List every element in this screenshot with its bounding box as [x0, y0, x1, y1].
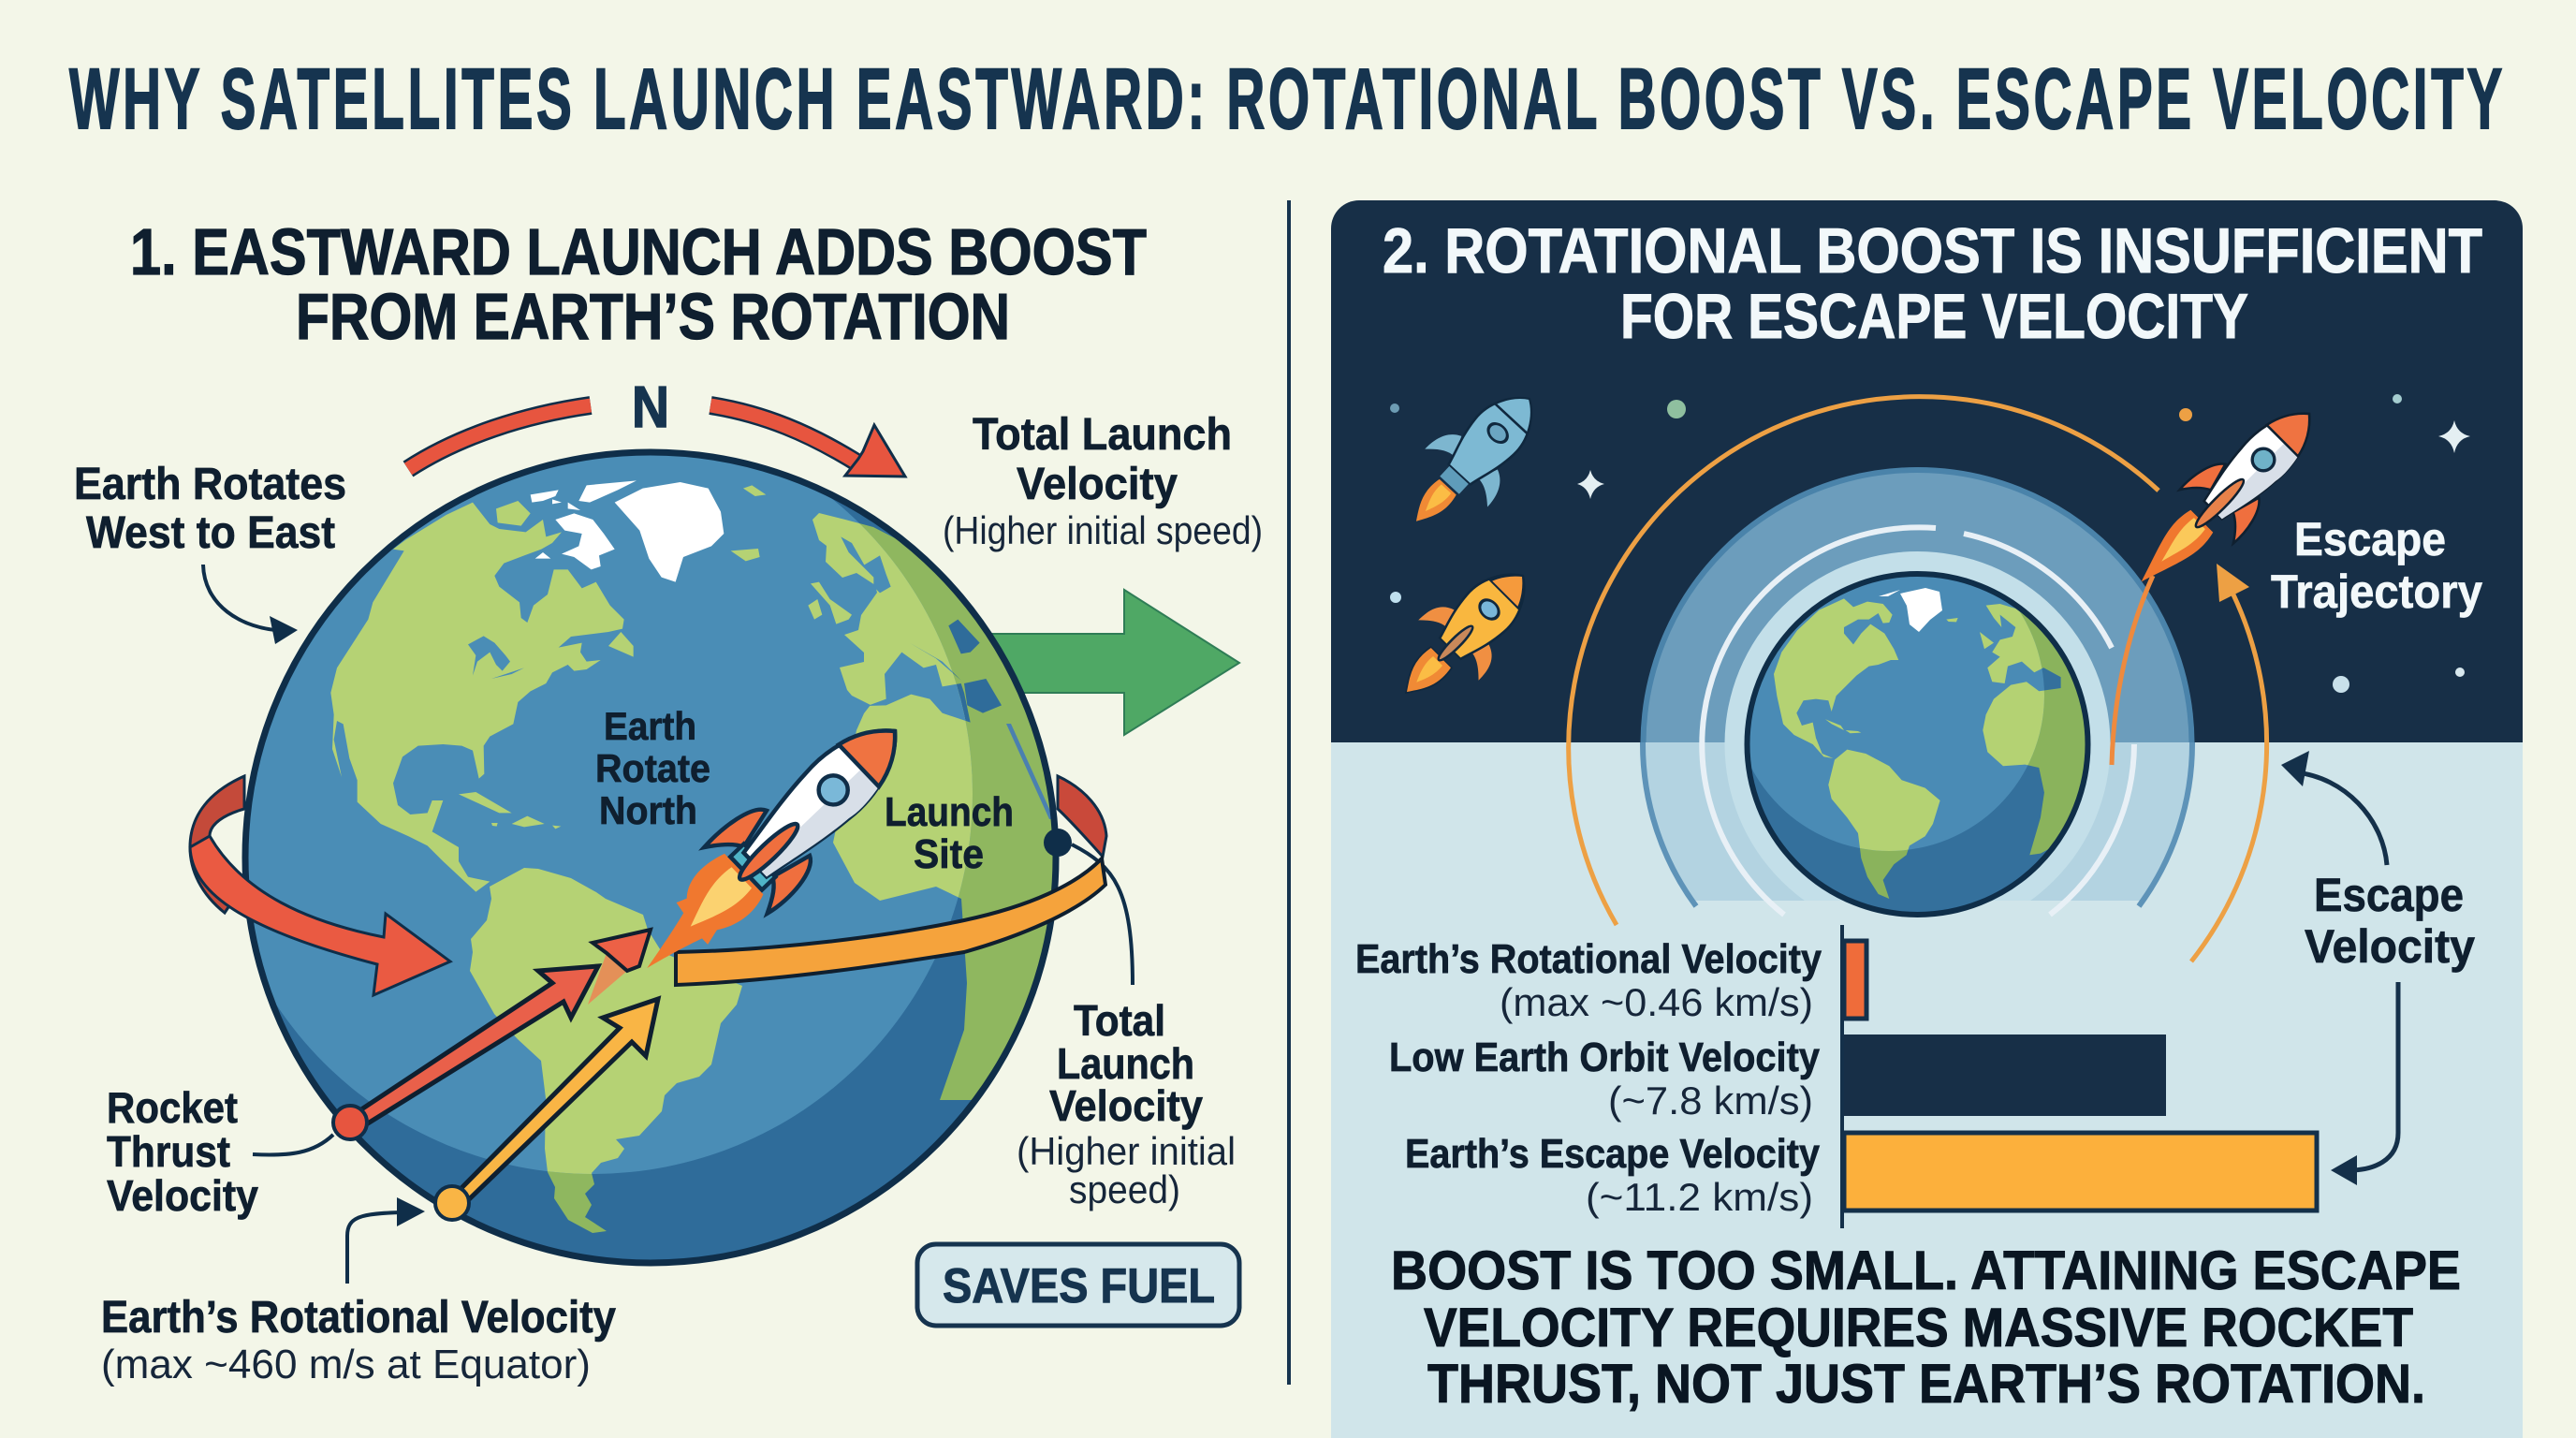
- label: escape trajectory: Escape: [2294, 513, 2446, 565]
- arrow: rotational velocity: [435, 999, 658, 1220]
- leader line: rocket thrust: [253, 1135, 333, 1155]
- heading: panel 2: FOR ESCAPE VELOCITY: [1620, 281, 2248, 352]
- icon: white escape rocket: [2115, 387, 2336, 609]
- globe: left earth: [242, 449, 1060, 1266]
- arc: orbit trajectory: [1569, 397, 2159, 925]
- arc: escape arrow: [2191, 564, 2267, 961]
- label: escape velocity: Escape: [2314, 869, 2464, 921]
- ribbon: orange equator band: [676, 858, 1105, 985]
- heading: panel 1: 1. EASTWARD LAUNCH ADDS BOOST: [130, 215, 1147, 288]
- label: earth rotates west to east: [74, 460, 346, 558]
- icon: main rocket: [614, 697, 927, 1002]
- chart axis: [1840, 925, 1844, 1228]
- label: total launch velocity top: (Higher initial speed): [943, 508, 1263, 552]
- panel: escape velocity: [1331, 200, 2523, 1438]
- label: total launch velocity lower: Velocity: [1049, 1081, 1203, 1130]
- label: launch site: Launch: [885, 789, 1014, 835]
- bar chart: velocities: [1355, 925, 2317, 1228]
- label: earth's rotational velocity: [101, 1293, 616, 1387]
- heading: panel 1: [130, 215, 1147, 353]
- callout: saves fuel: [917, 1244, 1239, 1326]
- icon: yellow rocket: [1376, 546, 1553, 723]
- label: rocket thrust velocity: Thrust: [107, 1127, 230, 1176]
- label: total launch velocity top: Velocity: [1017, 460, 1178, 509]
- conclusion text: BOOST IS TOO SMALL. ATTAINING ESCAPE: [1391, 1240, 2461, 1301]
- arrow: north rotation left arc: [408, 405, 591, 469]
- stars and dots: [1390, 394, 2470, 693]
- panel: eastward launch: [74, 215, 1263, 1387]
- bar: earth's escape velocity: Earth’s Escape Velocity: [1405, 1131, 1820, 1177]
- leader line: launch site to total velocity: [1072, 844, 1133, 985]
- bar: earth's rotational velocity: (max ~0.46 km/s): [1500, 980, 1813, 1024]
- bar: low earth orbit velocity: Low Earth Orbit Velocity: [1389, 1034, 1820, 1080]
- label: earth rotate north: Earth: [604, 704, 696, 748]
- label: earth rotate north: North: [599, 788, 697, 832]
- conclusion text: THRUST, NOT JUST EARTH’S ROTATION.: [1427, 1354, 2425, 1415]
- label: total launch velocity lower: speed): [1069, 1167, 1180, 1211]
- heading: panel 2: [1383, 215, 2482, 352]
- bar: low earth orbit velocity: (~7.8 km/s): [1608, 1078, 1813, 1123]
- icon: blue rocket: [1385, 370, 1560, 550]
- label: total launch velocity lower: [1017, 996, 1236, 1211]
- panel background: [1331, 200, 2523, 1438]
- label: earth's rotational velocity: (max ~460 m/s at Equator): [101, 1342, 591, 1387]
- arrow: escape velocity up pointer: [2281, 751, 2387, 865]
- label: total launch velocity lower: Total: [1074, 996, 1165, 1045]
- label: total launch velocity lower: Launch: [1057, 1039, 1194, 1088]
- bar: earth's rotational velocity: Earth’s Rotational Velocity: [1355, 936, 1822, 982]
- label: earth rotates west to east: West to East: [86, 508, 335, 558]
- divider: [1287, 200, 1291, 1385]
- label: launch site: [885, 789, 1014, 877]
- conclusion text: VELOCITY REQUIRES MASSIVE ROCKET: [1424, 1298, 2413, 1358]
- launch site dot: [1044, 829, 1072, 857]
- label: earth rotates west to east: Earth Rotates: [74, 460, 346, 509]
- label: escape velocity: Velocity: [2305, 920, 2475, 973]
- label: earth rotate north: Rotate: [595, 746, 710, 790]
- bar: earth's escape velocity: [1405, 1131, 2317, 1219]
- compass N: N: [632, 375, 669, 440]
- arrow: green total velocity: [973, 590, 1239, 735]
- heading: panel 1: FROM EARTH’S ROTATION: [296, 280, 1010, 353]
- arrow: north rotation right arc: [710, 405, 905, 477]
- arrow: escape velocity to bar: [2331, 982, 2398, 1185]
- label: escape velocity: [2305, 869, 2475, 973]
- bar: earth's rotational velocity: [1355, 936, 1866, 1024]
- label: total launch velocity top: Total Launch: [973, 410, 1232, 460]
- atmosphere rings: [1640, 467, 2195, 917]
- callout: saves fuel: SAVES FUEL: [943, 1259, 1215, 1313]
- ribbon: red rotation arrow: [190, 776, 450, 995]
- arrow: rocket thrust: [333, 930, 651, 1139]
- label: launch site: Site: [914, 831, 984, 877]
- bar: low earth orbit velocity: [1389, 1034, 2166, 1123]
- arrow: rotational velocity pointer: [347, 1197, 425, 1284]
- label: earth's rotational velocity: Earth’s Rotational Velocity: [101, 1293, 616, 1343]
- arc: rocket exhaust trail: [2112, 576, 2153, 765]
- label: earth rotate north: [595, 704, 710, 832]
- label: escape trajectory: Trajectory: [2271, 565, 2482, 618]
- label: rocket thrust velocity: [107, 1083, 258, 1220]
- bar: earth's escape velocity: (~11.2 km/s): [1586, 1175, 1813, 1219]
- arrow: west to east pointer: [203, 565, 298, 644]
- label: escape trajectory: [2271, 513, 2482, 618]
- label: rocket thrust velocity: Rocket: [107, 1083, 238, 1132]
- label: total launch velocity top: [943, 410, 1263, 552]
- globe: right earth: [1741, 566, 2097, 922]
- conclusion text: [1391, 1240, 2461, 1415]
- label: total launch velocity lower: (Higher initial: [1017, 1129, 1236, 1173]
- label: rocket thrust velocity: Velocity: [107, 1171, 258, 1220]
- ribbon: back of rotation band: [1058, 776, 1106, 857]
